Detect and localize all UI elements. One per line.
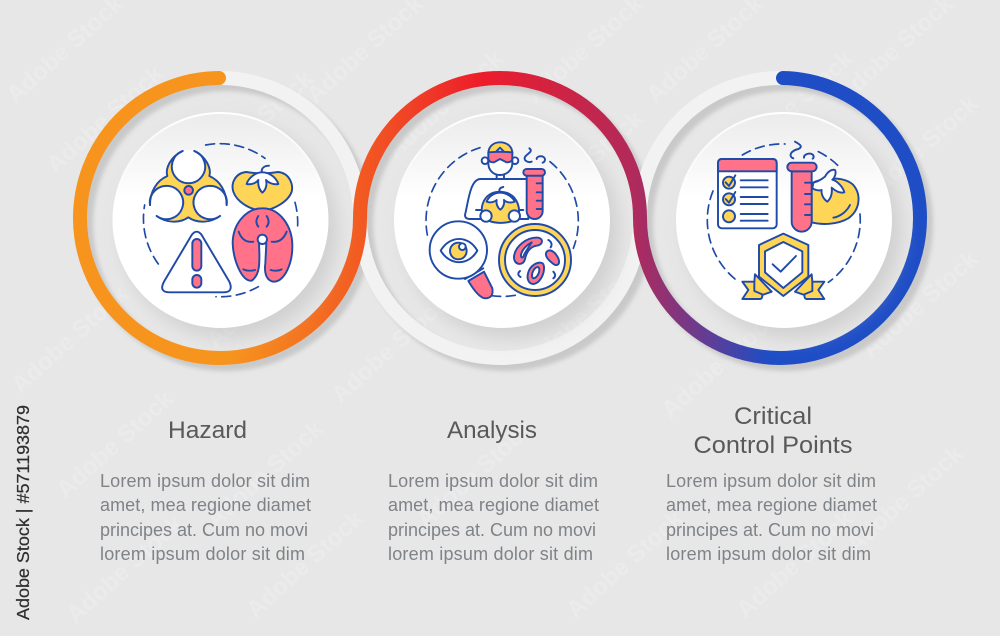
icon: tomato (812, 170, 859, 224)
icon: critical control points group (707, 142, 860, 299)
icon: petri dish (499, 224, 571, 296)
stock id label: Adobe Stock | #571193879 (13, 405, 33, 620)
text block: Critical Control Points description (666, 471, 877, 564)
text block: Analysis description: principes at. Cum no movi (388, 520, 596, 540)
heading: Hazard: Hazard (168, 417, 247, 444)
text block: Analysis description (388, 471, 599, 564)
watermark: Adobe Stock (241, 505, 369, 624)
text block: Critical Control Points description: principes at. Cum no movi (666, 520, 874, 540)
dashed circle (707, 144, 860, 282)
text block: Analysis description: amet, mea regione diamet (388, 495, 599, 515)
light track ribbon (222, 78, 782, 358)
heading: Critical Control Points: Critical (734, 403, 812, 430)
text block: Hazard description: principes at. Cum no movi (100, 520, 308, 540)
watermark: Adobe Stock (326, 290, 454, 409)
watermark: Adobe Stock (411, 415, 539, 534)
icon: analysis group (426, 142, 578, 298)
watermark: Adobe Stock (51, 385, 179, 504)
heading: Critical Control Points: Control Points (694, 432, 852, 459)
coloured gradient ribbon (80, 78, 920, 358)
watermark: Adobe Stock (521, 105, 649, 224)
watermark: Adobe Stock (381, 45, 509, 164)
icon: biohazard symbol (150, 150, 227, 222)
watermark: Adobe Stock (731, 505, 859, 624)
watermark: Adobe Stock (61, 510, 189, 629)
watermark: Adobe Stock (656, 305, 784, 424)
panel: analysis disc (394, 112, 619, 338)
text block: Critical Control Points description: lorem ipsum dolor sit dim (666, 544, 871, 564)
panel: critical control points disc (676, 112, 901, 338)
text block: Analysis description: Lorem ipsum dolor sit dim (388, 471, 598, 491)
icon: test tube (787, 142, 817, 232)
text block: Critical Control Points description: amet, mea regione diamet (666, 495, 877, 515)
icon: magnifier with eye (430, 221, 493, 298)
icon: tomato (233, 166, 292, 211)
icon: test tube (523, 148, 545, 219)
icon: inspector with tomato (465, 142, 528, 223)
watermark: Adobe Stock (731, 45, 859, 164)
watermark: Adobe Stock (41, 60, 169, 179)
watermark: Adobe Stock (6, 280, 134, 399)
watermark: Adobe Stock (191, 65, 319, 184)
watermark: Adobe Stock (856, 90, 984, 209)
icon: warning triangle (162, 232, 231, 292)
text block: Hazard description: Lorem ipsum dolor sit dim (100, 471, 310, 491)
watermark: Adobe Stock (201, 415, 329, 534)
icon: checklist (718, 159, 777, 228)
text block: Hazard description (100, 471, 311, 564)
icon: salmon steak (233, 208, 292, 282)
text block: Hazard description: amet, mea regione diamet (100, 495, 311, 515)
heading: Analysis: Analysis (447, 417, 537, 444)
watermark: Adobe Stock (856, 245, 984, 364)
heading: Critical Control Points (694, 403, 852, 459)
icon: shield badge (742, 234, 824, 299)
watermark: Adobe Stock (561, 505, 689, 624)
watermark: Adobe Stock (841, 440, 969, 559)
ribbon shadow (86, 84, 926, 364)
text block: Analysis description: lorem ipsum dolor sit dim (388, 544, 593, 564)
watermark: Adobe Stock (521, 255, 649, 374)
text block: Hazard description: lorem ipsum dolor sit dim (100, 544, 305, 564)
text block: Critical Control Points description: Lorem ipsum dolor sit dim (666, 471, 876, 491)
icon: hazard group (143, 144, 298, 297)
dashed circle (143, 144, 298, 297)
watermark: Adobe Stock (201, 235, 329, 354)
panel: hazard disc (112, 112, 337, 338)
dashed circle (426, 148, 578, 296)
